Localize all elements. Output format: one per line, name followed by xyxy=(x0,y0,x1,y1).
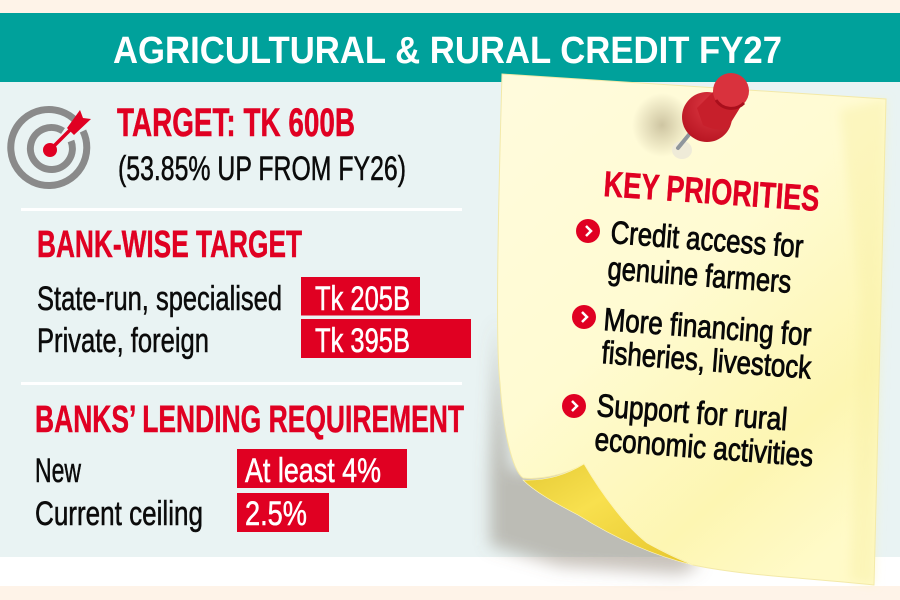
label: state-run, specialised: State-run, specialised xyxy=(37,280,282,318)
icon: target with dart xyxy=(11,110,91,186)
text: growth from FY26: (53.85% UP FROM FY26) xyxy=(118,150,406,188)
priority 1: genuine farmers xyxy=(606,250,793,300)
curled corner xyxy=(523,464,693,565)
priority 1 xyxy=(576,214,805,300)
bar: Tk 395B xyxy=(301,319,471,360)
top cream band xyxy=(0,0,900,13)
heading: banks' lending requirement: BANKS’ LENDING REQUIREMENT xyxy=(35,399,464,441)
note paper xyxy=(498,74,886,585)
bottom cream band xyxy=(0,586,900,600)
bar: Tk 395B: Tk 395B xyxy=(315,322,410,360)
priority 1: Credit access for xyxy=(609,214,805,264)
priority 2 xyxy=(572,301,813,386)
label: private, foreign: Private, foreign xyxy=(37,322,209,360)
priority 3: Support for rural xyxy=(595,387,789,437)
label: current ceiling: Current ceiling xyxy=(35,495,203,533)
panel: left content background xyxy=(0,82,900,557)
icon: red push pin xyxy=(632,73,749,159)
priority 3 xyxy=(562,387,815,473)
bar: Tk 205B: Tk 205B xyxy=(315,280,410,318)
priority 2: fisheries, livestock xyxy=(600,334,813,386)
note cast shadow xyxy=(490,320,700,574)
panel: sticky note with key priorities xyxy=(490,73,886,585)
title: AGRICULTURAL & RURAL CREDIT FY27 xyxy=(113,30,782,72)
headline: target amount: TARGET: TK 600B xyxy=(117,101,355,145)
priority 3: economic activities xyxy=(593,421,815,473)
heading: bank-wise target: BANK-WISE TARGET xyxy=(37,224,302,266)
label: new: New xyxy=(35,452,81,490)
note edge tint xyxy=(840,99,886,585)
bar: 2.5%: 2.5% xyxy=(245,495,307,533)
header band xyxy=(0,13,900,82)
heading: key priorities: KEY PRIORITIES xyxy=(602,163,821,219)
priority 2: More financing for xyxy=(602,301,813,353)
bar: Tk 205B xyxy=(301,277,420,318)
bar: at least 4%: At least 4% xyxy=(245,452,381,490)
